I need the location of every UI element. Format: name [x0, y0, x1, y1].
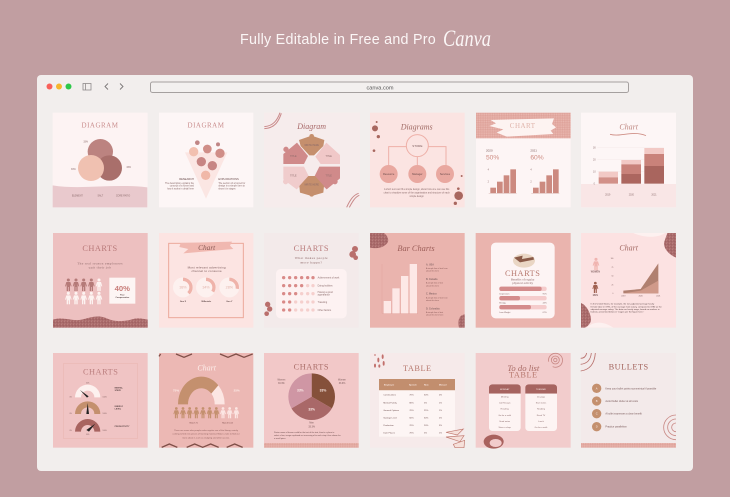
card: table: 0%: [439, 395, 442, 397]
card: bar chart with list: B. Canada: [426, 279, 438, 281]
card: area chart: 2020: [639, 295, 643, 297]
card: people chart: 40%: [115, 284, 130, 293]
card: tree diagram: [370, 113, 465, 207]
card: gauges: LEVEL: [115, 409, 122, 411]
card: gauges: 100%: [103, 430, 107, 432]
card: stacked bar chart: 10: [593, 171, 596, 173]
card: pie chart: Poster name of lesson could be the text of the text, there's a place to: [274, 431, 335, 434]
card: table: Savings Level: [383, 417, 397, 419]
card: rating chart: Having a good: [318, 292, 333, 294]
card: donut charts: 38%: [179, 286, 187, 290]
card: people chart: quit their job: [89, 266, 111, 270]
card: gauges: STATE: [115, 389, 122, 392]
card: rating chart: Traveling: [318, 301, 328, 304]
card: funnel diagram: DIAGRAM: [188, 122, 224, 130]
card: funnel diagram: The description explains the: [165, 182, 195, 185]
card: to do list table: Go for a walk: [535, 426, 548, 429]
card: venn diagram: SALT: [98, 194, 104, 197]
card: donut charts: Chart: [198, 243, 216, 252]
card: to do list table: TUESDAY: [536, 388, 547, 391]
card: arc and people: Match %: [189, 421, 198, 424]
card: bar chart with list: A simple line of text here: [426, 267, 449, 270]
card: progress bars: [476, 233, 571, 328]
card: bar chart with list: about this item: [426, 299, 439, 302]
card: venn diagram: DIAGRAM: [82, 122, 118, 130]
card: area chart: 2021: [656, 295, 660, 297]
card: radial diagram: [264, 113, 360, 207]
card: arc and people: There are some who people make regular use of the library, mainly: [174, 429, 239, 432]
card: twin bar chart: 60%: [530, 155, 544, 162]
card: to do list table: Send notes: [499, 420, 510, 423]
card: tree diagram: chart to visualize some of the organization and structure of each: [384, 191, 450, 194]
card: progress bars: physical activity: [512, 281, 533, 285]
card: table: 5%: [424, 402, 427, 404]
card: tree diagram: Services: [440, 172, 451, 176]
card: gauges: PRODUCTIVITY: [115, 426, 130, 428]
card: bullets: Keep your bullet points symmetrical if possible: [605, 387, 657, 390]
card: twin bar chart: 4: [488, 169, 490, 171]
card: to do list table: Go for a walk: [498, 414, 512, 417]
card: area chart: fashion, presented below in "wages per the figure here.": [591, 311, 644, 314]
card: bullets: BULLETS: [609, 363, 649, 372]
card: tree diagram: Manager: [412, 172, 423, 176]
card: table: Production: [383, 424, 394, 427]
card: pie chart: a small piece: [274, 438, 286, 440]
card: pie chart: 33%: [308, 407, 315, 411]
card: table: Date Places: [383, 432, 395, 435]
card: twin bar chart: 2020: [486, 149, 493, 153]
card: pie chart: [264, 353, 359, 448]
card: twin bar chart: 2021: [530, 149, 537, 153]
row 3 right cards: [370, 353, 676, 449]
card: area chart: [581, 233, 676, 328]
card: table: 30%: [424, 417, 428, 419]
card: bar chart with list: about this item: [426, 270, 439, 273]
card: pie chart: 33%: [297, 388, 304, 392]
card: gauges: 100%: [103, 413, 107, 415]
card: progress bars: Benefits of regular: [511, 277, 535, 281]
card: donut charts: Gen X: [180, 301, 187, 303]
card: progress bars: 90%: [543, 293, 547, 295]
card: area chart: 25: [611, 284, 613, 286]
card: rating chart: Other factors: [318, 309, 332, 312]
card: rating chart: What makes people: [295, 256, 328, 260]
card: venn diagram: CORE RATIO: [116, 194, 130, 197]
card: tree diagram: simple design: [410, 196, 424, 198]
card: rating chart: Achievement of work: [318, 277, 340, 280]
card: to do list table: [476, 353, 571, 449]
card: area chart: 0: [612, 293, 613, 295]
card: to do list table: TABLE: [509, 371, 538, 380]
card: to do list table: Do yoga: [537, 397, 546, 399]
address bar: canva.com: [366, 85, 394, 91]
card: area chart: 2019: [621, 295, 625, 297]
card: radial diagram: TITLE: [325, 156, 332, 158]
card: table: Now: [424, 385, 429, 387]
card: progress bars: CHARTS: [505, 269, 540, 278]
card: bar chart with list: about this item: [426, 284, 439, 287]
card: pie chart: 33.3%: [308, 426, 315, 428]
card: gauges: 100%: [103, 396, 107, 398]
card: donut charts: [159, 233, 253, 328]
card: pie chart: 33.3%: [278, 383, 285, 385]
card: twin bar chart: CHART: [510, 122, 536, 130]
card: stacked bar chart: 2021: [651, 194, 657, 196]
card: bar chart with list: about this item here: [426, 314, 444, 317]
card: stacked bar chart: 2019: [605, 194, 611, 196]
card: bar chart with list: A. USA: [426, 263, 434, 266]
card: pie chart: Women: [338, 380, 347, 382]
card: area chart: 100: [611, 258, 613, 260]
card: progress bars: Depression: [499, 292, 509, 295]
card: table: Employee: [384, 385, 395, 387]
card: people chart: Poor: [120, 293, 125, 296]
row 1 left cards: [53, 113, 360, 207]
window controls: [46, 84, 123, 90]
card: table: 80%: [409, 402, 414, 404]
card: people chart: Compensation: [115, 296, 130, 299]
card: twin bar chart: 2: [530, 181, 532, 183]
card: twin bar chart: 50%: [486, 155, 499, 162]
row 1 right cards: [370, 113, 676, 207]
card: radial diagram: TITLE: [325, 175, 332, 177]
card: rating chart: Doing hobbies: [318, 286, 333, 288]
card: arc and people: 75%: [173, 389, 179, 393]
card: stacked bar chart: [581, 113, 676, 207]
card: bullets: C: [596, 412, 598, 416]
card: table: 70%: [409, 395, 414, 397]
card: bar chart with list: [370, 233, 465, 328]
card: bar chart with list: A simple line of text here: [426, 296, 449, 299]
card: funnel diagram: [159, 113, 253, 207]
card: arc and people: Chart: [197, 363, 217, 372]
page heading: Canva: [443, 26, 491, 51]
card: twin bar chart: 2: [488, 181, 490, 183]
card: progress bars: 44%: [543, 303, 547, 305]
card: gauges: ENERGY: [115, 406, 124, 408]
card: to do list table: Meeting: [501, 396, 509, 399]
card: gauges: 0%: [69, 396, 72, 398]
card: table: 70%: [409, 410, 414, 412]
card: funnel diagram: design in a simple form to: [218, 185, 246, 188]
card: donut charts: Millenials: [201, 301, 212, 303]
address bar: [150, 82, 628, 92]
card: bullets: A: [596, 386, 598, 390]
card: twin bar chart: [476, 113, 571, 207]
card: funnel diagram: how it works in detail here: [167, 187, 195, 190]
card: to do list table: Start notes: [536, 402, 546, 405]
card: pie chart: CHARTS: [294, 363, 329, 372]
card: stacked bar chart: 0: [594, 183, 596, 185]
card: progress bars: Energy: [499, 302, 506, 305]
card: to do list table: Store a shop: [499, 426, 512, 429]
card: to do list table: Lunch: [538, 421, 545, 423]
card: pie chart: 33%: [320, 388, 326, 392]
card: tree diagram: STORE: [412, 144, 422, 148]
card: donut charts: 34%: [202, 286, 210, 290]
card: table: Speech: [409, 385, 417, 387]
card: to do list table: MONDAY: [500, 388, 510, 391]
card: gauges: 0%: [69, 413, 72, 415]
card: gauges: 0%: [69, 430, 72, 432]
card: bar chart with list: Bar Charts: [397, 244, 435, 253]
card: bullets: Practice parallelism: [605, 426, 627, 429]
card: area chart: 75: [611, 267, 613, 269]
card: tree diagram: Resource: [383, 172, 395, 176]
card: radial diagram: Diagram: [296, 122, 326, 131]
card: table: Mental Family: [383, 401, 398, 404]
row 3 left cards: [53, 353, 359, 448]
card: table: 70%: [409, 425, 414, 427]
card: area chart: 50: [611, 276, 613, 278]
card: radial diagram: TITLE: [290, 156, 297, 158]
card: table: General Options: [383, 409, 399, 412]
card: bullets: [581, 353, 676, 448]
card: venn diagram: 33%: [83, 141, 88, 143]
card: tree diagram: A short text can fill a simple design, about how one can use this: [384, 188, 450, 191]
card: area chart: In the United States, for example, the non-adjusted average hourly: [591, 303, 655, 306]
card: table: 1%: [439, 410, 442, 412]
card: rating chart: [264, 233, 359, 328]
card: bar chart with list: D. Colombia: [426, 308, 440, 310]
card: bar chart with list: A simple line of text: [426, 282, 444, 285]
card: progress bars: 67%: [543, 312, 547, 314]
page heading: [240, 26, 491, 51]
card: funnel diagram: RESEARCH: [179, 177, 194, 181]
card: people chart: The real reason employees: [77, 261, 123, 265]
card: table: 2%: [439, 417, 442, 419]
card: to do list table: Reading: [537, 409, 546, 411]
card: tree diagram: Diagrams: [400, 123, 433, 132]
card: people chart: [53, 233, 148, 328]
card: rating chart: appearance: [318, 294, 331, 297]
card: to do list table: Read TV: [537, 415, 546, 417]
page heading: Fully Editable in Free and Pro: [240, 32, 436, 48]
card: gauges: 50%: [86, 383, 90, 385]
card: arc and people: Match level: [222, 421, 234, 424]
card: funnel diagram: The section of a funnel for: [218, 182, 245, 185]
card: stacked bar chart: 30: [593, 148, 596, 150]
card: table: 3%: [439, 425, 442, 427]
card: table: 25%: [424, 410, 428, 412]
card: table: 30%: [424, 395, 428, 397]
card: table: 20%: [424, 425, 428, 427]
card: table: 70%: [409, 433, 414, 435]
card: radial diagram: WRITE HERE: [304, 145, 319, 147]
card: stacked bar chart: 20: [593, 159, 596, 161]
card: rating chart: more happy?: [300, 260, 322, 264]
card: rating chart: CHARTS: [294, 244, 329, 253]
card: table: 60%: [409, 417, 414, 419]
card: donut charts: channel to consume: [192, 269, 222, 273]
card: gauges: [53, 353, 148, 448]
card: pie chart: Women: [277, 380, 286, 382]
card: stacked bar chart: 2020: [629, 194, 635, 196]
card: pie chart: select a fine, image explained an increasing of to each step it has shown for: [274, 434, 341, 437]
card: people chart: CHARTS: [82, 244, 118, 253]
card: area chart: female labor in 1995, of the average male salary, compared to 1980 as the: [591, 305, 663, 308]
browser window: [37, 75, 693, 471]
card: donut charts: Gen Y: [226, 301, 233, 303]
card: radial diagram: WRITE HERE: [304, 184, 319, 186]
card: twin bar chart: 4: [530, 169, 532, 171]
card: progress bars: Lose Weight: [499, 311, 511, 314]
card: gauges: MENTAL: [115, 386, 124, 389]
card: table: 1%: [439, 402, 442, 404]
card: venn diagram: ELEMENT: [72, 195, 83, 197]
card: gauges: 50%: [86, 434, 90, 436]
card: table: [370, 353, 465, 448]
row 2 left cards: [53, 233, 359, 328]
card: arc and people: [159, 353, 253, 448]
card: funnel diagram: show it in stages: [218, 187, 236, 190]
card: table: 5%: [424, 433, 427, 435]
card: venn diagram: 33%: [126, 167, 131, 169]
card: bar chart with list: A simple line of text: [426, 311, 444, 314]
card: arc and people: coming to find new pieces of learning material. Make a note to find out: [173, 433, 240, 436]
card: to do list table: To do list: [507, 363, 540, 373]
card: gauges: CHARTS: [83, 368, 118, 377]
card: area chart: MEN: [593, 295, 598, 297]
card: table: 1%: [439, 433, 442, 435]
card: area chart: Chart: [619, 243, 639, 252]
card: funnel diagram: concept of a funnel and: [170, 185, 195, 188]
card: arc and people: more about it, such as studying and other access.: [182, 437, 230, 440]
card: area chart: WOMEN: [591, 272, 600, 274]
card: arc and people: 25%: [234, 389, 240, 393]
card: table: Manual: [439, 385, 447, 387]
card: table: TABLE: [403, 364, 432, 373]
card: bullets: Avoid bullet clutter at all costs: [605, 400, 639, 403]
card: bullets: B: [596, 399, 598, 403]
card: area chart: adjusted average salary. The data are hourly wage, based on workers in: [591, 308, 660, 311]
card: stacked bar chart: Chart: [619, 122, 639, 131]
card: donut charts: 28%: [226, 286, 234, 290]
card: to do list table: Call Recaps: [499, 403, 510, 405]
card: venn diagram: [53, 113, 148, 207]
card: venn diagram: 33%: [71, 169, 76, 171]
row 2 right cards: [370, 233, 676, 328]
card: bullets: D: [596, 425, 598, 429]
card: to do list table: Reading: [501, 409, 509, 411]
card: pie chart: 33.3%: [339, 383, 345, 385]
card: bullets: A bullet expresses a clear benefit: [605, 413, 642, 416]
card: table: Communities: [383, 394, 396, 397]
card: funnel diagram: EXPLORATIONS: [218, 177, 239, 181]
card: radial diagram: TITLE: [290, 175, 297, 177]
card: bar chart with list: C. Mexico: [426, 294, 437, 296]
card: donut charts: Most relevant advertising: [188, 266, 226, 270]
card: pie chart: Men: [309, 423, 315, 425]
